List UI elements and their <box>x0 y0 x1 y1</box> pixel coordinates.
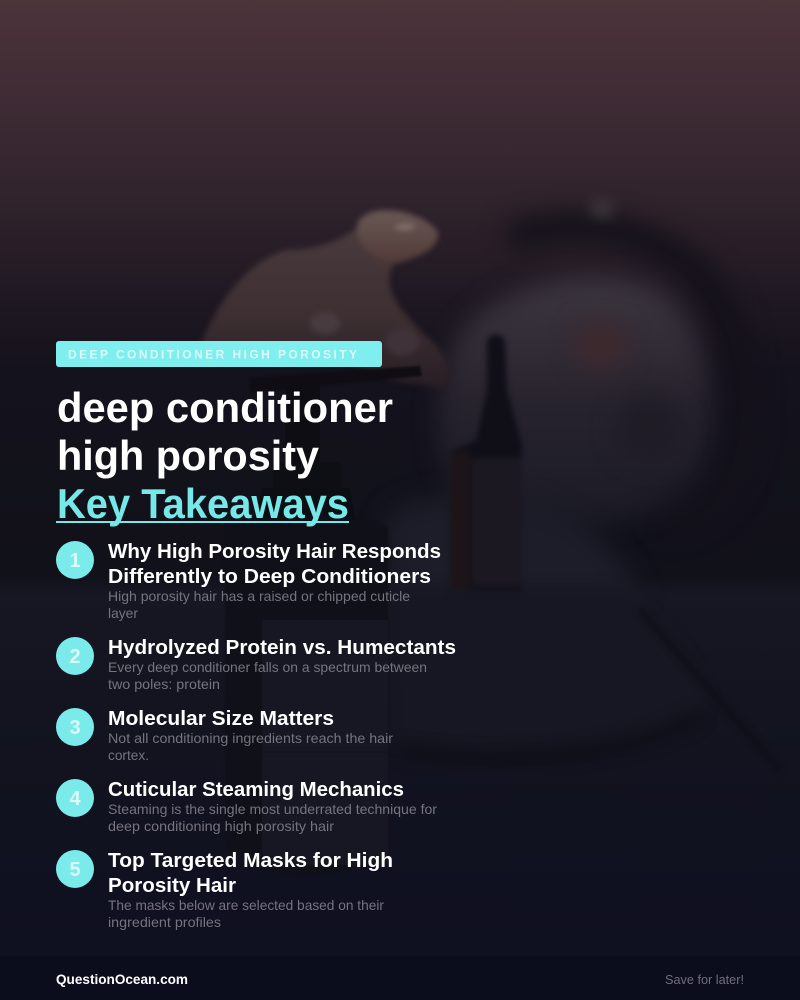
takeaway 2: two poles: protein <box>108 676 220 692</box>
takeaway 1: 1 <box>69 550 81 572</box>
takeaway 3: cortex. <box>108 747 149 763</box>
takeaway 5 <box>56 850 393 930</box>
pump bottle <box>225 366 422 875</box>
takeaway 4: Steaming is the single most underrated technique for <box>108 801 437 817</box>
takeaway 5: ingredient profiles <box>108 914 221 930</box>
takeaway 5: The masks below are selected based on their <box>108 897 384 913</box>
takeaway 4: 4 <box>69 788 81 810</box>
title: high porosity <box>57 432 320 479</box>
title <box>56 384 393 527</box>
headband highlight <box>590 198 614 218</box>
takeaway 3: 3 <box>69 717 81 739</box>
takeaway 3 <box>56 708 393 763</box>
takeaway 4: deep conditioning high porosity hair <box>108 818 334 834</box>
takeaway 1 <box>56 541 441 621</box>
diagonal pipette <box>640 610 780 770</box>
footer bar: QuestionOcean.com <box>56 971 188 987</box>
takeaway 4: Cuticular Steaming Mechanics <box>108 779 404 801</box>
badge: DEEP CONDITIONER HIGH POROSITY <box>68 348 357 362</box>
takeaway 2: Hydrolyzed Protein vs. Humectants <box>108 637 456 659</box>
hand pressing the pump <box>200 210 450 388</box>
eye patch <box>572 321 628 369</box>
takeaway 2: Every deep conditioner falls on a spectrum between <box>108 659 427 675</box>
takeaway 1: layer <box>108 605 138 621</box>
nose shadow <box>616 396 684 464</box>
takeaway 5: 5 <box>69 859 81 881</box>
takeaway 5: Porosity Hair <box>108 875 236 897</box>
pillow under the head <box>385 495 640 600</box>
takeaway 5: Top Targeted Masks for High <box>108 850 393 872</box>
takeaway 3: Molecular Size Matters <box>108 708 334 730</box>
title: Key Takeaways <box>57 480 349 527</box>
takeaway 1: High porosity hair has a raised or chipped cuticle <box>108 588 410 604</box>
dropper bottle <box>450 334 522 590</box>
takeaway 3: Not all conditioning ingredients reach the hair <box>108 730 393 746</box>
badge <box>56 341 382 367</box>
footer bar <box>0 956 800 1000</box>
takeaway 2: 2 <box>69 646 81 668</box>
large pillow on the bed <box>385 590 708 750</box>
footer bar: Save for later! <box>665 972 744 987</box>
takeaway 1: Differently to Deep Conditioners <box>108 566 431 588</box>
takeaway 1: Why High Porosity Hair Responds <box>108 541 441 563</box>
title: deep conditioner <box>57 384 393 431</box>
hair around the blurred face <box>510 227 744 520</box>
takeaway 4 <box>56 779 437 834</box>
blurred face <box>438 277 712 529</box>
pillow shadow <box>400 715 700 758</box>
takeaway 2 <box>56 637 456 692</box>
